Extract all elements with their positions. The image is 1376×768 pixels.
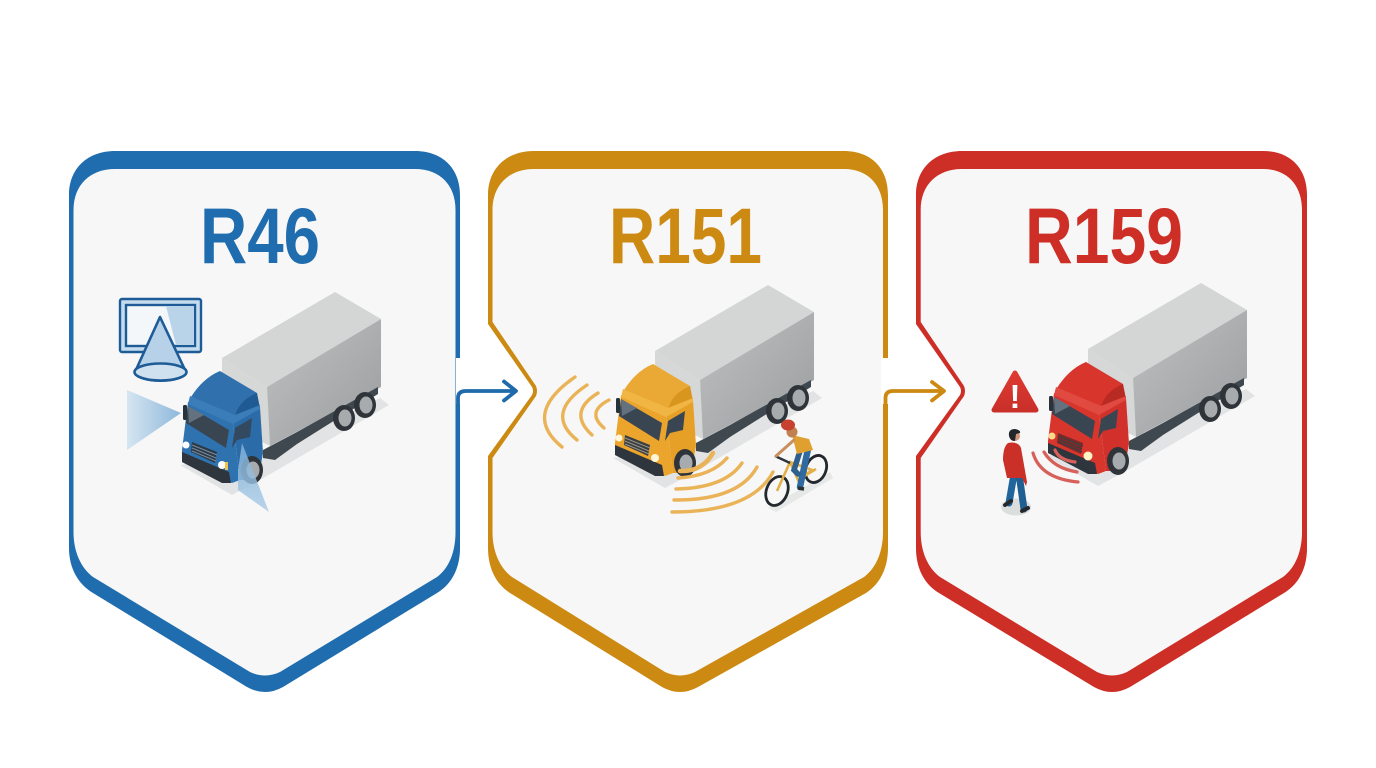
sensor waves: pedestrian detection <box>1033 450 1078 482</box>
heading: R159: R159 <box>1025 191 1183 280</box>
cyclist <box>762 420 833 512</box>
icon: warning triangle <box>994 373 1036 415</box>
panel: R151 <box>488 151 1307 692</box>
pedestrian <box>1001 429 1031 516</box>
sensor waves: side <box>672 453 773 512</box>
panel: R159 <box>916 151 1307 692</box>
sensor waves: front <box>545 377 609 447</box>
heading: R46: R46 <box>200 191 320 280</box>
icon: warning triangle: ! <box>1010 378 1020 415</box>
panel: R46 <box>69 151 462 692</box>
heading: R151: R151 <box>609 191 762 280</box>
arrow: R151 to R159 <box>886 382 944 404</box>
truck: red <box>1046 283 1255 486</box>
truck: blue <box>180 292 389 495</box>
icon: camera monitor with view cone <box>120 299 201 381</box>
arrow: R46 to R151 <box>458 382 516 404</box>
truck: orange <box>613 285 822 488</box>
icon: side camera field of view <box>238 443 269 512</box>
icon: front camera field of view <box>127 390 181 450</box>
